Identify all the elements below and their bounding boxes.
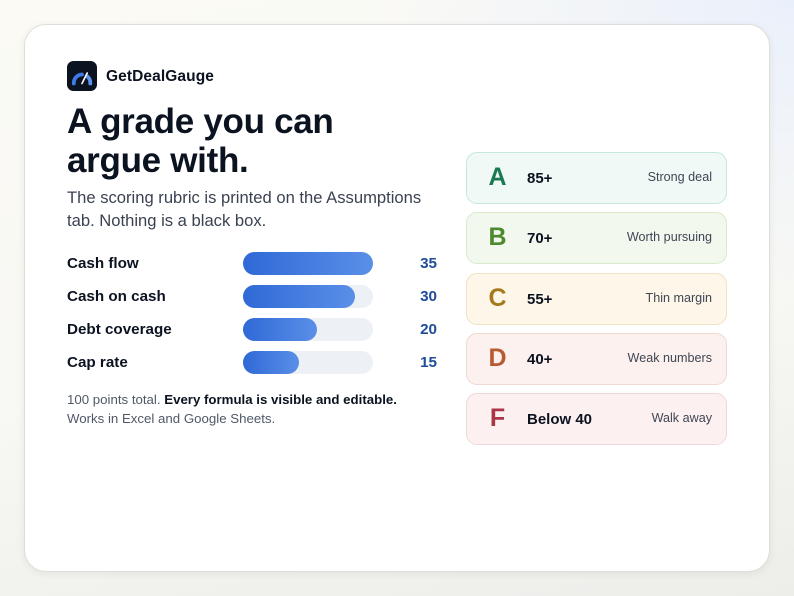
grade C: C: [488, 284, 507, 312]
bar: cash flow: [243, 252, 373, 275]
footnote: 100 points total. Every formula is visible and editable.: [67, 392, 397, 407]
row label: debt coverage: Debt coverage: [67, 321, 172, 338]
footnote: Works in Excel and Google Sheets.: [67, 411, 275, 426]
grade D: D: [488, 344, 507, 372]
value: 20: 20: [420, 321, 437, 338]
grade B: [466, 212, 727, 264]
subtitle: [67, 188, 421, 230]
grade D: 40+: [527, 351, 552, 368]
value: 35: 35: [420, 255, 437, 272]
grade A: [466, 152, 727, 204]
grade B: 70+: [527, 230, 552, 247]
bar: cash on cash: [243, 285, 373, 308]
title: A grade you can: [67, 102, 334, 141]
grade C: Thin margin: [646, 291, 712, 305]
grade F: Below 40: [527, 411, 592, 428]
brand name: GetDealGauge: [106, 68, 214, 85]
grade B: Worth pursuing: [627, 230, 712, 244]
subtitle: The scoring rubric is printed on the Assumptions: [67, 188, 421, 207]
value: 30: 30: [420, 288, 437, 305]
row label: cash on cash: Cash on cash: [67, 288, 166, 305]
value: 15: 15: [420, 354, 437, 371]
grade A: Strong deal: [648, 170, 712, 184]
row label: cap rate: Cap rate: [67, 354, 128, 371]
grade B: B: [488, 223, 507, 251]
grade D: [466, 333, 727, 385]
footnote: [67, 392, 397, 426]
grade F: F: [490, 404, 505, 432]
grade D: Weak numbers: [628, 351, 712, 365]
bar: debt coverage: [243, 318, 373, 341]
subtitle: tab. Nothing is a black box.: [67, 210, 266, 230]
row label: cash flow: Cash flow: [67, 255, 139, 272]
grade A: 85+: [527, 170, 552, 187]
title: [67, 102, 334, 180]
grade C: 55+: [527, 291, 552, 308]
grade F: [466, 393, 727, 445]
grade F: Walk away: [652, 411, 712, 425]
grade C: [466, 273, 727, 325]
icon: gauge logo: [67, 61, 97, 91]
title: argue with.: [67, 141, 248, 180]
bar: cap rate: [243, 351, 373, 374]
grade A: A: [488, 163, 507, 191]
